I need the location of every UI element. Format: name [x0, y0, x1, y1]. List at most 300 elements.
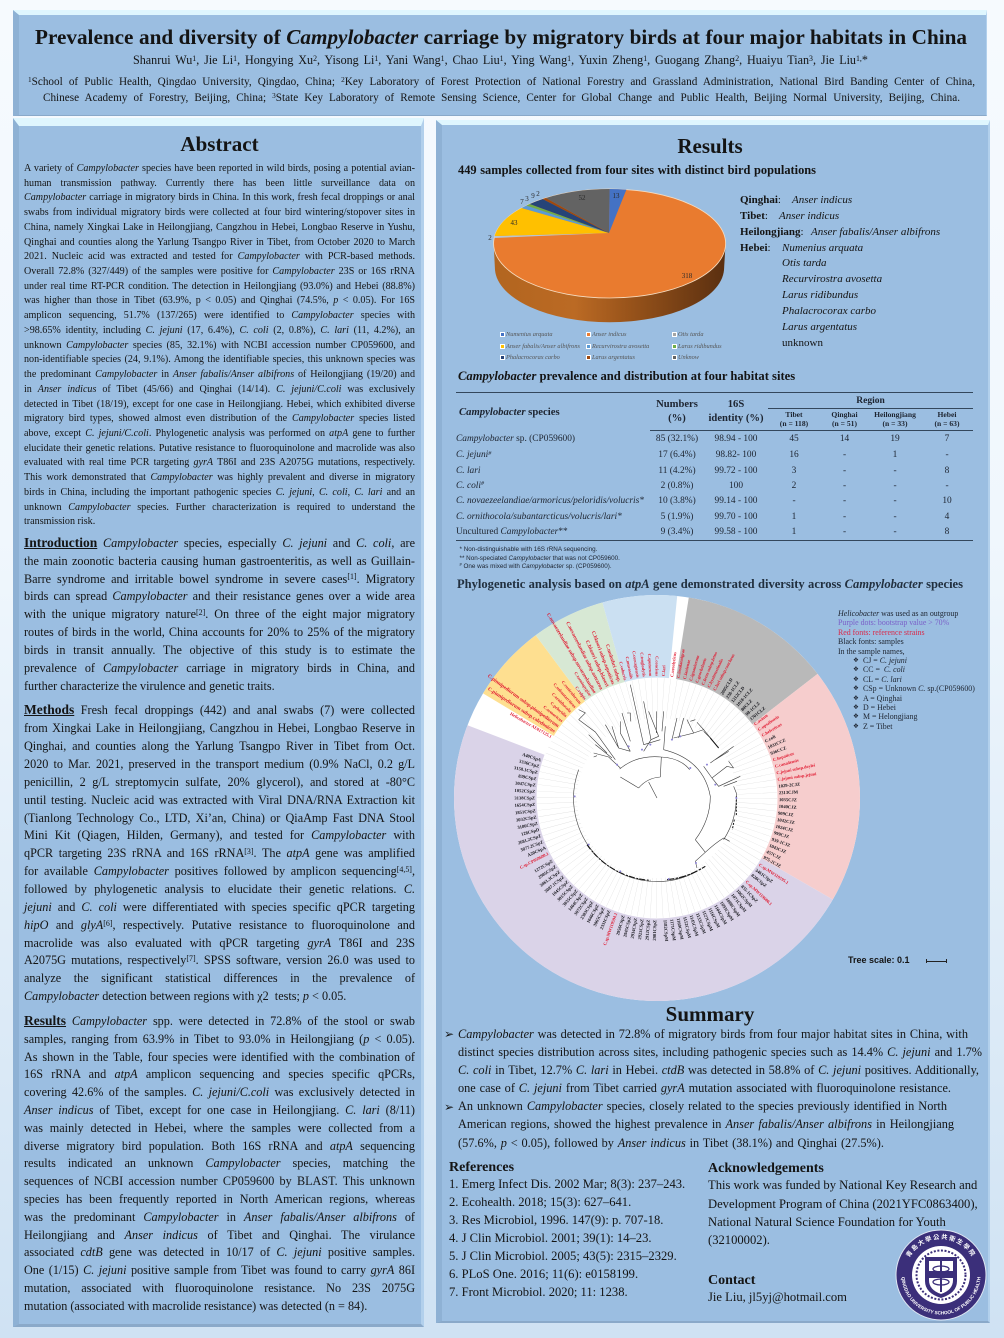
pie chart: bird species: 3: [525, 195, 529, 203]
tree labels: left half: 1045CSpZ: [551, 879, 569, 897]
table: species distribution: -: [893, 512, 897, 522]
table: species distribution: -: [893, 527, 897, 537]
references: 7. Front Microbiol. 2020; 11: 1238.: [449, 1285, 628, 1299]
tree legend: CL = C. lari: [863, 675, 902, 684]
subheading: samples: 449 samples collected from four sites with distinct bird populations: [458, 163, 816, 177]
text block: introduction: Barre syndrome and irritable bowel syndrome in severe cases[1]. Migratory: [24, 572, 415, 586]
tree labels: left half: C.taeniopygiae: [573, 671, 593, 697]
subheading: prevalence table: Campylobacter prevalence and distribution at four habitat sites: [458, 369, 795, 383]
text block: results: was the predominant Campylobacter in Anser fabalis/Anser albifrons of: [24, 1210, 415, 1224]
table: species distribution: 98.82- 100: [716, 450, 756, 460]
tree labels: left half: 2956CSpZ: [615, 915, 626, 936]
text block: methods: qPCR targeting 23S rRNA and 16S rRNA[3]. The atpA gene was amplified: [24, 846, 415, 860]
tree legend: Z = Tibet: [863, 722, 892, 731]
text block: abstract: above, except C. jejuni/C.coli. Phylogenetic analysis was performed on atpA gene to further: [24, 428, 415, 439]
table: species distribution: C. coli#: [456, 480, 484, 490]
tree labels: right half: 80CLZ: [740, 698, 753, 712]
tree labels: right half: [661, 648, 817, 942]
species by site list: Recurvirostra avosetta: [782, 273, 882, 285]
tree labels: right half: 855-1CSpZ: [740, 884, 759, 903]
text block: abstract: 2021. Nucleic acid was extracted and tested for Campylobacter with PCR-based methods.: [24, 251, 415, 262]
tree labels: right half: 975-2CJZ: [763, 855, 782, 869]
tree labels: right half: 1029-2CJZ: [778, 782, 800, 789]
text block: results: associated cdtB gene was detected in 10/17 of C. jejuni positive samples.: [24, 1245, 415, 1259]
panel: results and summary: [436, 120, 990, 1323]
species by site list: unknown: [782, 337, 823, 349]
text block: abstract: This work demonstrated that Campylobacter was highly prevalent and diverse in migratory: [24, 472, 415, 483]
table: species distribution: C. lari: [456, 466, 480, 476]
table: species distribution: -: [893, 466, 897, 476]
table: species distribution: -: [843, 480, 846, 490]
species by site list: Phalacrocorax carbo: [782, 305, 876, 317]
acknowledgements: Development Program of China (2021YFC0863400),: [708, 1197, 978, 1211]
tree labels: right half: C.lari subsp.concheus: [712, 653, 736, 691]
table: species distribution: C. ornithocola/subantarcticus/volucris/lari*: [456, 512, 622, 522]
text block: results: As shown in the Table, four species were identified with the combination of: [24, 1050, 415, 1064]
tree labels: right half: 1031CCZ: [767, 737, 786, 750]
table: species distribution: 4: [945, 512, 949, 522]
tree labels: left half: C.vulpis: [574, 685, 588, 701]
tree labels: left half: C.mucosalis: [625, 656, 634, 679]
text block: results: One (1/15) C. jejuni positive sample from Tibet was found to carry gyrA 86I: [24, 1263, 415, 1277]
table: species distribution: 16S: [728, 399, 744, 410]
text block: introduction: further characterize the virulence and genetic traits.: [24, 679, 275, 693]
text block: introduction: prevalence of Campylobacter carriage in migratory birds in China, and: [24, 661, 415, 675]
table: species distribution: (n = 33): [882, 418, 908, 428]
table: species distribution: (n = 51): [832, 418, 857, 428]
bullet arrows: ➢: [444, 1100, 454, 1114]
table: species distribution: Tibet: [785, 410, 803, 419]
subheading: phylogenetic analysis: Phylogenetic analysis based on atpA gene demonstrated diversity across Campylobacter species: [457, 577, 963, 591]
panel: results and summary: Phalacrocorax carbo: [506, 354, 560, 361]
table: species distribution: Heilongjiang: [874, 410, 916, 419]
tree labels: left half: C.subantarcticus: [552, 682, 577, 709]
table: species distribution: 99.14 - 100: [715, 496, 757, 506]
table: species distribution: -: [893, 480, 897, 490]
tree labels: left half: 3065CSpZ: [592, 907, 606, 927]
text block: results: mutation (associated with macrolide resistance) was detected (n = 84).: [24, 1299, 367, 1313]
acknowledgements: (32100002).: [708, 1233, 770, 1247]
contact: Jie Liu, jl5yj@hotmail.com: [708, 1290, 847, 1304]
table footnotes: [460, 546, 620, 570]
tree labels: right half: C.hepaticus: [772, 751, 795, 762]
tree labels: left half: A20CSpA: [527, 845, 547, 858]
tree labels: left half: 3158.1CSpZ: [514, 765, 538, 775]
tree labels: right half: C.lari: [661, 664, 666, 676]
tree labels: left half: 1046CSpZ: [586, 903, 600, 924]
table: species distribution: 14: [840, 434, 849, 444]
text block: methods: (Tianlong Technology Co., LTD, Xi’an, China) or QiaAmp Fast DNA Stool: [24, 811, 415, 825]
tree labels: left half: 3061.3CSpZ: [539, 869, 561, 888]
text block: introduction: [24, 535, 415, 693]
heading: Summary: Summary: [666, 1002, 754, 1026]
tree labels: left half: C.sp.CP059600.1: [519, 851, 549, 870]
tree labels: left half: C.troglodytis: [639, 652, 647, 677]
table: species distribution: 99.58 - 100: [715, 527, 757, 537]
tree labels: right half: 1701CLZ: [749, 706, 766, 721]
pie chart: bird species: 52: [578, 194, 586, 202]
tree labels: right half: 1182CSpM: [663, 920, 669, 942]
tree labels: right half: 1042CJZ: [777, 817, 795, 825]
contact: [708, 1272, 847, 1304]
authors: Shanrui Wu1, Jie Li1, Hongying Xu2, Yisong Li1, Yani Wang1, Chao Liu1, Ying Wang1, Yuxin Zheng1, Guogang Zhang2, Huaiyu Tian3, Jie Liu1,*: [133, 53, 868, 67]
panel: results and summary: Recurvirostra avosetta: [592, 343, 649, 350]
text block: results: Results Campylobacter spp. were detected in 72.8% of the stool or swab: [24, 1013, 415, 1028]
tree labels: right half: C.jejuni subsp.doylei: [776, 762, 816, 775]
text block: results: was mainly detected in Hebei, where the samples were collected from a: [24, 1121, 415, 1135]
text block: introduction: Introduction Campylobacter species, especially C. jejuni and C. coli, are: [24, 535, 415, 550]
tree labels: left half: 3035CSpZ: [561, 888, 579, 907]
tree labels: right half: 1116CSpM: [707, 907, 721, 929]
panel: results and summary: Anser fabalis/Anser albifrons: [506, 343, 580, 350]
tree labels: left half: 3015CSpZ: [556, 884, 574, 902]
panel: results and summary: Unknow: [678, 354, 699, 361]
table: species distribution: (n = 63): [934, 418, 960, 428]
affiliations: 1School of Public Health, Qingdao University, Qingdao, China; 2Key Laboratory of Forest Protection of National Forestry and Grassland Administration, National Bird Banding Center of China,: [28, 76, 975, 88]
table: species distribution: 1: [893, 450, 897, 460]
table: species distribution: -: [792, 496, 796, 506]
contact: Contact: [708, 1272, 755, 1288]
panel: results and summary: Numenius arquata: [506, 331, 552, 338]
table: species distribution: 8: [945, 527, 949, 537]
text block: results: diverse migratory bird population. Both 16S rRNA and atpA sequencing: [24, 1139, 415, 1153]
tree labels: left half: Helicobacter AE017125.1: [509, 711, 553, 739]
pie chart: bird species: 318: [682, 272, 693, 280]
tree labels: right half: 1071CSpM: [730, 893, 748, 914]
pie chart: bird species: 9: [531, 192, 535, 200]
table: species distribution: 9 (3.4%): [661, 527, 693, 537]
pie chart: bird species: 2: [536, 190, 540, 198]
species by site list: Anser fabalis/Anser albifrons: [811, 226, 940, 238]
acknowledgements: This work was funded by National Key Research and: [708, 1178, 977, 1192]
tree labels: right half: C.lanienae: [682, 659, 691, 680]
tree labels: left half: 1851CSpZ: [515, 808, 536, 815]
table: species distribution: 7: [945, 434, 949, 444]
text block: abstract: unknown Campylobacter species. Further characterization is required to understand the: [24, 502, 415, 513]
tree labels: right half: 1043CJZ: [769, 843, 787, 854]
tree scale bar: [848, 955, 947, 965]
text block: abstract: detected in Tibet (18/19), except for one case in Heilongjiang. Hebei, which exhibited diverse: [24, 398, 415, 410]
acknowledgements: [708, 1160, 978, 1247]
tree labels: left half: C.volucris: [618, 661, 628, 681]
tree labels: right half: C.sp.MW119600.1: [745, 879, 773, 906]
tree labels: left half: [486, 612, 660, 946]
text block: abstract: China, namely Xingkai Lake in Heilongjiang, Cangzhou in Hebei, Longbao Reserve in Yushu,: [24, 222, 415, 233]
table: species distribution: -: [945, 480, 949, 490]
tree labels: right half: 828CSpZ: [750, 873, 768, 888]
tree labels: left half: 839CSpZ: [518, 773, 537, 781]
species by site list: [740, 194, 940, 349]
table: species distribution: 2 (0.8%): [661, 480, 693, 490]
tree labels: right half: C.geochelonis: [694, 657, 707, 683]
tree labels: right half: C.upsaliensis: [757, 714, 780, 732]
tree branches: [574, 685, 740, 882]
tree labels: right half: 238-1CLZ: [725, 680, 741, 699]
text block: methods: analyze the significant statistical differences in the prevalence of: [24, 971, 415, 985]
pie chart: bird species: [488, 188, 726, 322]
summary bullets: [458, 1027, 982, 1150]
text block: results: mutation, associated with fluoroquinolone resistance. No 23S 2075G: [24, 1281, 415, 1295]
tree legend: Red fonts: reference strains: [838, 628, 925, 637]
tree labels: left half: C.corcagiensis: [631, 651, 641, 678]
tree labels: left half: C.cuniculorum: [561, 680, 582, 705]
tree labels: right half: C.coli: [764, 734, 777, 744]
tree labels: left half: 3186CSpZ: [517, 821, 538, 830]
text block: results: covering 42.6% of the samples. C. jejuni/C.coli was exclusively detected in: [24, 1085, 415, 1099]
tree labels: left half: 3032CSpZ: [516, 815, 537, 823]
text block: abstract: amplicon sequencing, 51.7% (137/265) were identified to Campylobacter species with: [24, 310, 415, 321]
tree labels: left half: 3077.2CSpZ: [520, 839, 544, 853]
tree labels: right half: 1093CSpM: [719, 900, 735, 922]
table: species distribution: C. novaezeelandiae/armoricus/peloridis/volucris*: [456, 496, 644, 506]
text block: abstract: human transmission pathway. Currently there has been little surveillance data on: [24, 178, 415, 189]
references: 5. J Clin Microbiol. 2005; 43(5): 2315–2329.: [449, 1249, 677, 1263]
table: species distribution: 10 (3.8%): [658, 496, 696, 506]
table: species distribution: 19: [890, 434, 900, 444]
text block: results: results indicated an unknown Campylobacter species, matching the: [24, 1156, 415, 1170]
table: species distribution: Numbers: [656, 399, 698, 410]
table: species distribution: 1: [792, 512, 796, 522]
table: species distribution: -: [893, 496, 897, 506]
references: 2. Ecohealth. 2018; 15(3): 627–641.: [449, 1195, 631, 1209]
tree labels: right half: C.insulaenigrae: [676, 648, 686, 678]
tree labels: right half: 1035CJZ: [779, 797, 797, 802]
tree scale bar: Tree scale: 0.1: [848, 955, 910, 965]
table: species distribution: 1: [792, 527, 796, 537]
tree labels: right half: C.helveticus: [761, 722, 783, 738]
table: species distribution: 99.70 - 100: [715, 512, 757, 522]
text block: introduction: routes of birds in the world, China accounts for 20% to 25% of the migratory: [24, 625, 415, 639]
text block: abstract: Campylobacter carriage in migratory birds in China. In this work, fresh fecal droppings or anal: [24, 192, 415, 203]
text block: introduction: birds in transit annually. The objective of this study is to estimate the: [24, 643, 415, 657]
tree labels: left half: 2985CSpZ: [537, 864, 557, 880]
table: species distribution: 8: [945, 466, 949, 476]
tree labels: left half: C.peloridis: [549, 701, 568, 718]
species by site list: Numenius arquata: [782, 242, 863, 254]
panel: results and summary: Otis tarda: [678, 331, 703, 338]
tree labels: left half: 2912CSpZ: [644, 920, 651, 941]
text block: results: Anser indicus of Tibet, except for one case in Heilongjiang. C. lari (8/11): [24, 1103, 415, 1117]
text block: results: [23, 1013, 415, 1313]
table: species distribution: 85 (32.1%): [656, 434, 698, 444]
summary bullets: American regions, showed the highest prevalence in Anser fabalis/Anser albifrons in Heilongjiang: [458, 1117, 954, 1131]
tree labels: left half: 2945CSpZ: [622, 916, 632, 938]
table: species distribution: Region: [856, 396, 885, 406]
pie chart: bird species: 7: [520, 198, 524, 206]
logo: university seal: QINGDAO UNIVERSITY SCHOOL OF PUBLIC HEALTH: [900, 1277, 980, 1314]
tree labels: right half: 1088CSpM: [725, 897, 742, 918]
tree labels: left half: C.novaezeelandiae subsp.novaezeelandiae: [545, 612, 597, 695]
table: species distribution: 98.94 - 100: [715, 434, 757, 444]
bullet arrows: [444, 1027, 454, 1114]
tree labels: right half: 1018-1CLZ: [735, 687, 754, 707]
table: species distribution: Campylobacter sp. (CP059600): [456, 434, 575, 444]
tree labels: right half: C.canadensis: [774, 757, 799, 769]
affiliations: Chinese Academy of Forestry, Beijing, China; 3State Key Laboratory of Remote Sensing Science, Center for Global Change and Public Health, Beijing Normal University, Beijing, China.: [43, 92, 960, 104]
tree labels: left half: 1272CSpZ: [533, 859, 554, 874]
tree labels: right half: C.avium: [753, 713, 769, 726]
text block: methods: 2020 to Mar. 2021, preserved in the transport medium (0.9% NaCl, 0.2 g/L: [24, 757, 415, 771]
tree labels: right half: 1024CJZ: [775, 824, 794, 833]
summary bullets: (57.6%, p < 0.05), followed by Anser indicus in Tibet (38.1%) and Qinghai (27.5%).: [458, 1136, 884, 1150]
tree legend: D = Hebei: [863, 703, 896, 712]
tree labels: left half: 2901CSpZ: [652, 920, 657, 941]
text block: methods: A2075G mutations, respectively[7]. SPSS software, version 26.0 was used to: [24, 953, 415, 967]
tree labels: left half: 3072CSpZ: [573, 896, 589, 916]
tree labels: left half: 1464CSpZ: [567, 893, 584, 912]
panel: results and summary: Larus argentatus: [592, 354, 635, 361]
tree labels: left half: 1052CSpZ: [514, 788, 535, 794]
table: species distribution: -: [843, 527, 846, 537]
tree legend: A = Qinghai: [863, 694, 902, 703]
logo: university seal: 青島大學公共衛生學院: [906, 1234, 976, 1257]
text block: abstract: the predominant Campylobacter in Anser fabalis/Anser albifrons of Heilongjiang (19/20) and: [24, 369, 415, 380]
tree labels: right half: 1160CSpM: [676, 918, 685, 941]
tree labels: left half: 3336CSpZ: [519, 759, 540, 769]
text block: abstract: non-identifiable species (24, 9.1%). Among the identifiable species, this unknown species was: [24, 354, 415, 365]
table: species distribution: identity (%): [708, 412, 764, 424]
table: species distribution: -: [843, 496, 846, 506]
table: species distribution: 99.72 - 100: [715, 466, 757, 476]
logo: university seal: [896, 1230, 986, 1320]
references: [449, 1160, 685, 1299]
panel: abstract and main text: [13, 118, 424, 1327]
pie chart: bird species: 43: [510, 219, 518, 227]
tree labels: left half: C.molothri subsp.: [604, 643, 622, 684]
tree labels: left half: 3138CSpZ: [514, 795, 535, 800]
tree labels: left half: C.novaezeelandiae subsp.aotearoa: [564, 621, 604, 691]
tree labels: right half: 3461CSpZ: [754, 868, 774, 884]
acknowledgements: Acknowledgements: [708, 1160, 824, 1176]
text block: abstract: Overall 72.8% (327/449) of the samples were positive for Campylobacter 23S or 16S rRNA: [24, 266, 415, 277]
table: species distribution: -: [843, 450, 846, 460]
tree labels: right half: 457CJZ: [766, 849, 782, 860]
pie legend: [500, 331, 722, 361]
text block: methods: Methods Fresh fecal droppings (442) and anal swabs (7) were collected: [24, 702, 415, 717]
text block: abstract: >98.65% identity, including C. jejuni (17, 6.4%), C. coli (2, 0.8%), C. lari (11, 4.2%), an: [24, 325, 415, 336]
tree labels: right half: C.iguaniorum: [688, 654, 700, 681]
tree legend: M = Helongjiang: [863, 712, 917, 721]
tree legend: [838, 609, 975, 731]
heading: Results: Results: [677, 134, 743, 158]
tree labels: right half: C.fetus subsp.fetus: [700, 651, 718, 686]
table: species distribution: 17 (6.4%): [658, 450, 696, 460]
tree labels: right half: 1040CJZ: [779, 804, 797, 810]
table: species distribution: C. jejuni#: [456, 450, 491, 460]
tree labels: right half: 1212CLD: [730, 685, 746, 703]
tree legend: Black fonts: samples: [838, 637, 904, 646]
references: 4. J Clin Microbiol. 2001; 39(1): 14–23.: [449, 1231, 652, 1245]
tree legend: CJ = C. jejuni: [863, 656, 907, 665]
species by site list: Qinghai:: [740, 194, 781, 206]
table: species distribution: 11 (4.2%): [658, 466, 696, 476]
species by site list: Otis tarda: [782, 257, 827, 269]
tree labels: left half: C.ornithocola: [551, 692, 573, 714]
tree labels: left half: 2923CSpZ: [637, 919, 645, 940]
tree labels: left half: 2383CSpZ: [579, 900, 594, 920]
tree labels: left half: 3047CSpZ: [515, 780, 536, 788]
tree labels: right half: 939-1CJZ: [771, 837, 791, 848]
table: species distribution: 3: [792, 466, 796, 476]
summary bullets: distinct species distribution across sites, including pathogenic species such as 14.4% C. jejuni and 1.7%: [458, 1045, 982, 1059]
table: species distribution: [456, 392, 973, 541]
tree legend: Helicobacter was used as an outgroup: [838, 609, 958, 618]
table footnotes: * Non-distinguishable with 16S rRNA sequencing.: [460, 546, 597, 553]
tree labels: right half: 1152CSpM: [682, 916, 692, 939]
text block: abstract: elucidate their genetic relations. Putative resistance to fluoroquinolone and macrolide was also: [24, 443, 415, 454]
text block: methods: Mini Kit (Qiagen, Hilden, Germany), and tested for Campylobacter with: [24, 828, 415, 842]
species by site list: Tibet:: [740, 210, 768, 222]
affiliations: [28, 76, 975, 104]
text block: results: sequences of NCBI accession number CP059600 by BLAST. This unknown: [24, 1174, 415, 1188]
bullet arrows: ➢: [444, 1027, 454, 1041]
tree labels: left half: 128CSpD: [520, 827, 540, 837]
text block: abstract: birds in China, including the important pathogenic species C. jejuni, C. coli, C. lari and an: [24, 487, 415, 498]
tree legend: In the sample names,: [838, 647, 905, 656]
text block: abstract: migratory bird types, showed almost even distribution of the Campylobacter species listed: [24, 413, 415, 424]
text block: abstract: unknown Campylobacter species (85, 32.1%) with NCBI accession number CP059600, and: [24, 340, 415, 351]
tree labels: left half: C.sputorum: [647, 653, 653, 677]
heading: Abstract: Abstract: [180, 132, 259, 156]
tree labels: left half: 2681.2CSpZ: [517, 833, 542, 845]
species by site list: Anser indicus: [779, 210, 839, 222]
table: species distribution: 100: [729, 480, 743, 490]
species by site list: Hebei:: [740, 242, 771, 254]
tree labels: right half: 1171CSpM: [669, 919, 677, 942]
species by site list: Anser indicus: [792, 194, 852, 206]
tree labels: right half: 936CCZ: [770, 745, 787, 756]
acknowledgements: National Natural Science Foundation for Youth: [708, 1215, 946, 1229]
text block: methods: penicillin, 2 g/L streptomycin sulfate, 20% glycerol), and stored at -80°C: [24, 775, 415, 789]
table: species distribution: 5 (1.9%): [661, 512, 693, 522]
text block: abstract: evaluated with real time PCR targeting gyrA T86I and 23S A2075G mutations, respectively.: [24, 457, 415, 468]
text block: results: samples, ranging from 63.9% in Tibet to 93.0% in Heilongjiang (p < 0.05).: [24, 1032, 415, 1046]
table: species distribution: 16: [789, 450, 799, 460]
text block: methods: until testing. Nucleic acid was extracted with Viral DNA/RNA Extraction kit: [24, 793, 415, 807]
tree labels: right half: 1062CSpM: [735, 888, 754, 909]
references: 1. Emerg Infect Dis. 2002 Mar; 8(3): 237–243.: [449, 1177, 685, 1191]
text block: abstract: swabs from individual migratory birds were collected at four bird wintering/stopover sites in: [24, 207, 415, 218]
text block: methods: from Xingkai Lake in Heilongjiang, Cangzhou in Hebei, Longbao Reserve in: [24, 721, 415, 735]
text block: abstract: [24, 163, 415, 527]
table: species distribution: (%): [668, 412, 686, 424]
summary bullets: Campylobacter was detected in 72.8% of migratory birds from four major habitat sites in China, with: [458, 1027, 968, 1041]
panel: results and summary: Larus ridibundus: [678, 343, 722, 350]
tree labels: right half: 2313CJM: [779, 789, 799, 795]
text block: methods: followed by phylogenetic analysis to elucidate their genetic relations. C.: [24, 882, 415, 896]
table: species distribution: Campylobacter species: [459, 406, 560, 418]
table: species distribution: -: [843, 512, 846, 522]
tree labels: left half: C.concisus: [655, 656, 660, 676]
table footnotes: # One was mixed with Campylobacter sp. (CP059600).: [460, 562, 612, 570]
panel: title banner: [13, 10, 987, 116]
tree labels: right half: 2005CLD: [719, 677, 734, 696]
text block: introduction: the main zoonotic bacteria causing human gastroenteritis, as well as Guillain-: [24, 554, 415, 568]
tree labels: right half: 98-1CLZ: [744, 701, 761, 717]
tree labels: right half: 1145CSpM: [689, 914, 700, 937]
species by site list: Larus argentatus: [782, 321, 857, 333]
table: species distribution: -: [945, 450, 949, 460]
text block: methods: macrolide was also evaluated with qPCR targeting gyrA T86I and 23S: [24, 936, 415, 950]
pie chart: bird species: 2: [488, 234, 492, 242]
table: species distribution: (n = 118): [780, 418, 808, 428]
references: References: [449, 1160, 514, 1174]
text block: introduction: birds can spread Campylobacter and their resistance genes over a wide area: [24, 589, 415, 603]
tree labels: left half: 3087.1CSpZ: [543, 874, 565, 894]
summary bullets: one case of C. jejuni from Tibet carried gyrA mutation associated with fluoroquinolone resistance.: [458, 1081, 951, 1095]
tree labels: left half: A40CSpA: [522, 752, 542, 763]
species by site list: Larus ridibundus: [782, 289, 858, 301]
